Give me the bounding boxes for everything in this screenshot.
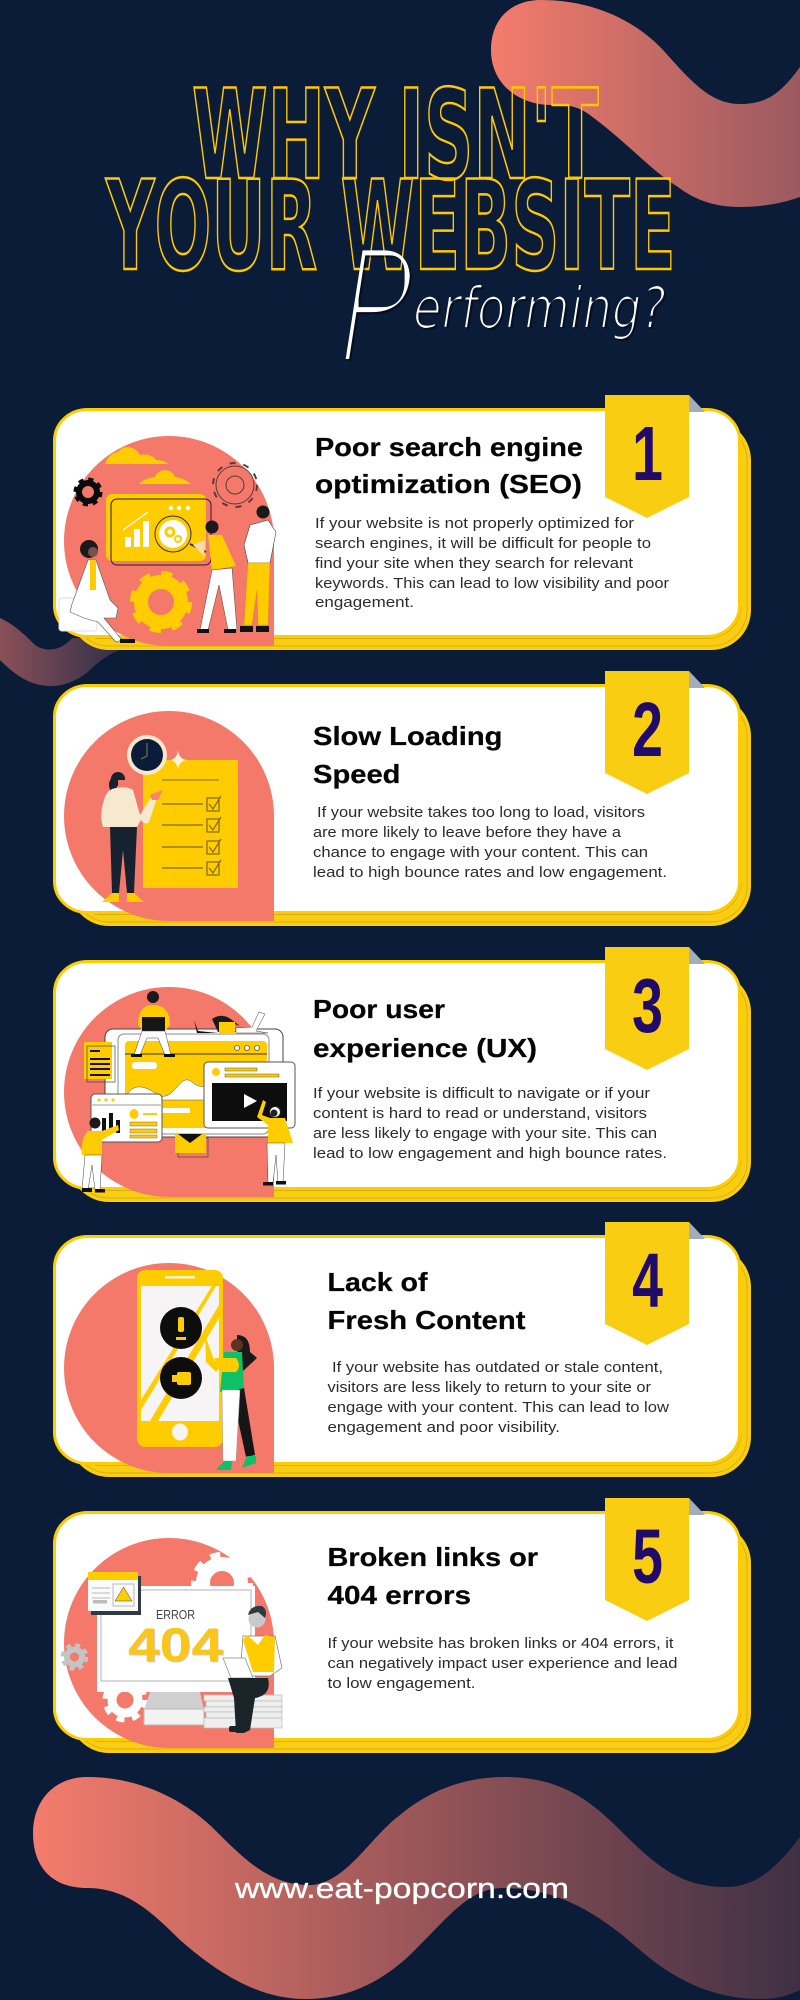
script subtitle: erforming? xyxy=(413,275,666,342)
card 1 body text: find your site when they search for relevant xyxy=(315,555,634,572)
card 1 heading xyxy=(315,432,583,499)
card 3 ribbon xyxy=(605,947,705,1070)
card 2 body text: chance to engage with your content. This can xyxy=(313,844,648,861)
card 2 body text: lead to high bounce rates and low engagement. xyxy=(313,864,667,881)
card 4 heading xyxy=(328,1267,526,1335)
card 5 body text xyxy=(328,1635,678,1692)
footer website url: www.eat-popcorn.com xyxy=(234,1873,569,1905)
title xyxy=(105,63,676,299)
card 5 body text: If your website has broken links or 404 errors, it xyxy=(328,1635,674,1652)
top-right gradient wave xyxy=(491,0,800,207)
card 2 front panel xyxy=(54,686,741,915)
card 1 body text: keywords. This can lead to low visibility and poor xyxy=(315,575,669,592)
card 3 body text: are less likely to engage with your site. This can xyxy=(313,1125,657,1142)
card 2 illustration: woman with checklist and clock xyxy=(64,711,274,921)
card 1 heading: Poor search engine xyxy=(315,432,583,462)
card 1 front panel xyxy=(54,410,741,639)
card 3 body text: content is hard to read or understand, visitors xyxy=(313,1105,647,1122)
card 5 ribbon: 5 xyxy=(632,1514,663,1600)
card 1 back layer xyxy=(69,420,751,650)
title: WHY ISN'T xyxy=(192,63,599,208)
card 2 ribbon: 2 xyxy=(632,687,663,773)
card 3 back layer xyxy=(69,972,751,1202)
card 1 ribbon: 1 xyxy=(632,411,663,497)
card 5 front panel xyxy=(54,1512,741,1742)
card 1 body text: search engines, it will be difficult for people to xyxy=(315,535,651,552)
card 3 front panel xyxy=(54,962,741,1191)
card 3 heading: experience (UX) xyxy=(313,1033,537,1063)
card 5 heading: Broken links or xyxy=(328,1542,538,1572)
card 3 body text xyxy=(313,1085,667,1162)
card 2 body text: If your website takes too long to load, visitors xyxy=(317,804,645,821)
card 3 heading xyxy=(313,994,537,1063)
card 3 heading: Poor user xyxy=(313,994,445,1024)
script subtitle xyxy=(337,216,666,402)
script subtitle: P xyxy=(337,216,415,402)
card 5 illustration: error 404 monitor: 404 xyxy=(128,1618,223,1671)
card 4 ribbon: 4 xyxy=(632,1238,663,1324)
card 5 heading xyxy=(328,1542,538,1610)
card 4 back layer xyxy=(69,1247,751,1477)
card 4 ribbon xyxy=(605,1222,705,1345)
card 4 body text: engagement and poor visibility. xyxy=(328,1419,560,1436)
card 5 ribbon xyxy=(605,1498,705,1621)
card 2 back layer xyxy=(69,696,751,926)
card 4: lack of fresh content xyxy=(54,1222,751,1477)
card 3 illustration: UX screens and people xyxy=(64,987,295,1197)
card 2 body text xyxy=(313,804,667,881)
card 1 body text xyxy=(315,515,669,611)
title: YOUR WEBSITE xyxy=(105,156,676,299)
card 1 body text: engagement. xyxy=(315,594,414,611)
card 4 front panel xyxy=(54,1236,741,1466)
card 2 heading xyxy=(313,721,502,789)
card 2 heading: Speed xyxy=(313,759,400,789)
card 4 heading: Lack of xyxy=(328,1267,428,1297)
card 3 body text: If your website is difficult to navigate or if your xyxy=(313,1085,650,1102)
card 4 heading: Fresh Content xyxy=(328,1305,526,1335)
card 2 body text: are more likely to leave before they have a xyxy=(313,824,622,841)
card 5 body text: can negatively impact user experience and lead xyxy=(328,1655,678,1672)
card 5 back layer xyxy=(69,1523,751,1753)
card 2 ribbon xyxy=(605,671,705,794)
bottom gradient wave xyxy=(33,1777,800,1999)
card 5 body text: to low engagement. xyxy=(328,1675,476,1692)
card 4 body text: If your website has outdated or stale content, xyxy=(332,1359,663,1376)
card 4 body text: visitors are less likely to return to your site or xyxy=(328,1379,651,1396)
card 5 heading: 404 errors xyxy=(328,1580,471,1610)
card 2 heading: Slow Loading xyxy=(313,721,502,751)
card 3 body text: lead to low engagement and high bounce rates. xyxy=(313,1145,667,1162)
card 5 illustration: error 404 monitor xyxy=(62,1538,282,1748)
card 3 ribbon: 3 xyxy=(632,963,663,1049)
card 4 body text xyxy=(328,1359,669,1436)
left gradient wave xyxy=(0,618,140,686)
card 1 body text: If your website is not properly optimized for xyxy=(315,515,634,532)
card 4 illustration: phone and woman xyxy=(64,1263,274,1473)
card 3: poor user experience xyxy=(54,947,751,1202)
card 1 illustration: search analytics team xyxy=(59,436,276,646)
card 5: broken links or 404 errors xyxy=(54,1498,751,1753)
card 5 illustration: error 404 monitor: ERROR xyxy=(156,1607,195,1622)
card 4 body text: engage with your content. This can lead to low xyxy=(328,1399,669,1416)
card 1: poor SEO xyxy=(54,395,751,650)
card 2: slow loading speed xyxy=(54,671,751,926)
card 1 ribbon xyxy=(605,395,705,518)
card 1 heading: optimization (SEO) xyxy=(315,469,582,499)
